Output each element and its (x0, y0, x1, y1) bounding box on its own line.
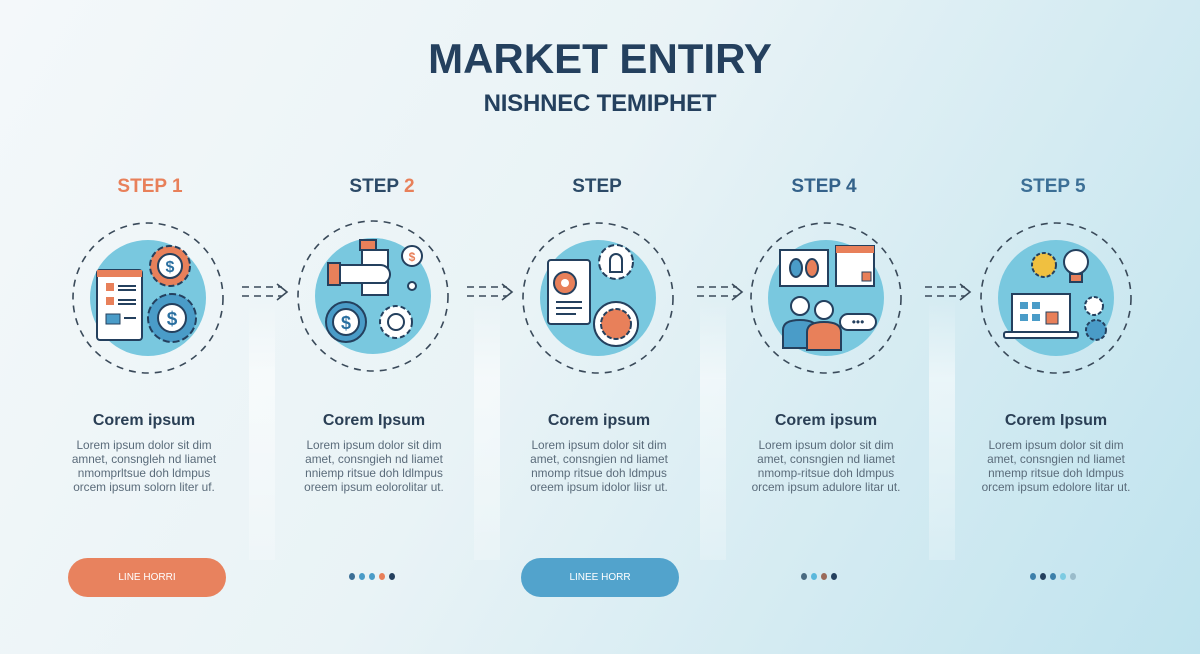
column 2 text: Corem Ipsum (323, 412, 425, 429)
arrow 1 (242, 284, 287, 300)
column 5 text: Corem Ipsum (1005, 412, 1107, 429)
column 2 text: amet, consngieh nd liamet (305, 452, 443, 466)
arrow 2 (467, 284, 512, 300)
column 4 text: nmomp-ritsue doh ldmpus (758, 466, 894, 480)
step 3 label: STEP (572, 176, 622, 197)
column 2 text: nniemp ritsue doh ldlmpus (305, 466, 443, 480)
step 1 label: STEP 1 (117, 176, 183, 197)
column 4 text: orcem ipsum adulore litar ut. (752, 480, 900, 494)
column 3 text: nmomp ritsue doh ldmpus (531, 466, 667, 480)
column 2 text: oreem ipsum eolorolitar ut. (304, 480, 444, 494)
column 2 text (304, 412, 444, 494)
icon: step 5 laptop and ideas (981, 223, 1131, 373)
column 5 text: amet, consngien nd liamet (987, 452, 1125, 466)
step 4 label: STEP 4 (791, 176, 857, 197)
column 2 text: Lorem ipsum dolor sit dim (306, 438, 442, 452)
column 3 text (530, 412, 668, 494)
column 4 text: Corem ipsum (775, 412, 877, 429)
column 1 text: nmomprltsue doh ldmpus (78, 466, 210, 480)
column 3 text: Corem ipsum (548, 412, 650, 429)
icon: step 2 hand with money (298, 221, 448, 371)
button 1: LINE HORRI (118, 572, 176, 583)
icon: step 1 checklist and gears: $ (166, 259, 175, 276)
column 3 text: amet, consngien nd liamet (530, 452, 668, 466)
column 1 text: amnet, consngleh nd liamet (72, 452, 216, 466)
dots 4 (801, 573, 837, 580)
arrow 4 (925, 284, 970, 300)
icon: step 3 document, bulb, gear (523, 223, 673, 373)
button 1 (68, 558, 226, 597)
column 4 text: Lorem ipsum dolor sit dim (758, 438, 894, 452)
column 5 text: Lorem ipsum dolor sit dim (988, 438, 1124, 452)
icon: step 1 checklist and gears: $ (167, 309, 178, 330)
icon: step 4 people and chat (751, 223, 901, 373)
icon: step 4 people and chat: ••• (852, 315, 864, 329)
step 5 label: STEP 5 (1020, 176, 1086, 197)
column 4 text (752, 412, 900, 494)
button 3: LINEE HORR (569, 572, 631, 583)
column 1 text (72, 412, 216, 494)
subtitle: NISHNEC TEMIPHET (484, 90, 716, 117)
column 1 text: Corem ipsum (93, 412, 195, 429)
icon: step 2 hand with money: $ (409, 250, 416, 264)
column 5 text: nmemp ritsue doh ldmpus (988, 466, 1124, 480)
button 3 (521, 558, 679, 597)
icon: step 2 hand with money: $ (341, 313, 351, 333)
title: MARKET ENTIRY (428, 35, 772, 82)
column 5 text: orcem ipsum edolore litar ut. (982, 480, 1130, 494)
dots 2 (349, 573, 395, 580)
column 3 text: oreem ipsum idolor liisr ut. (530, 480, 668, 494)
column 1 text: Lorem ipsum dolor sit dim (76, 438, 212, 452)
column 1 text: orcem ipsum solorn liter uf. (73, 480, 215, 494)
arrow 3 (697, 284, 742, 300)
step 2 label: STEP 2 (349, 176, 415, 197)
column 3 text: Lorem ipsum dolor sit dim (531, 438, 667, 452)
dots 5 (1030, 573, 1076, 580)
column 4 text: amet, consngien nd liamet (757, 452, 895, 466)
column 5 text (982, 412, 1130, 494)
icon: step 1 checklist and gears (73, 223, 223, 373)
